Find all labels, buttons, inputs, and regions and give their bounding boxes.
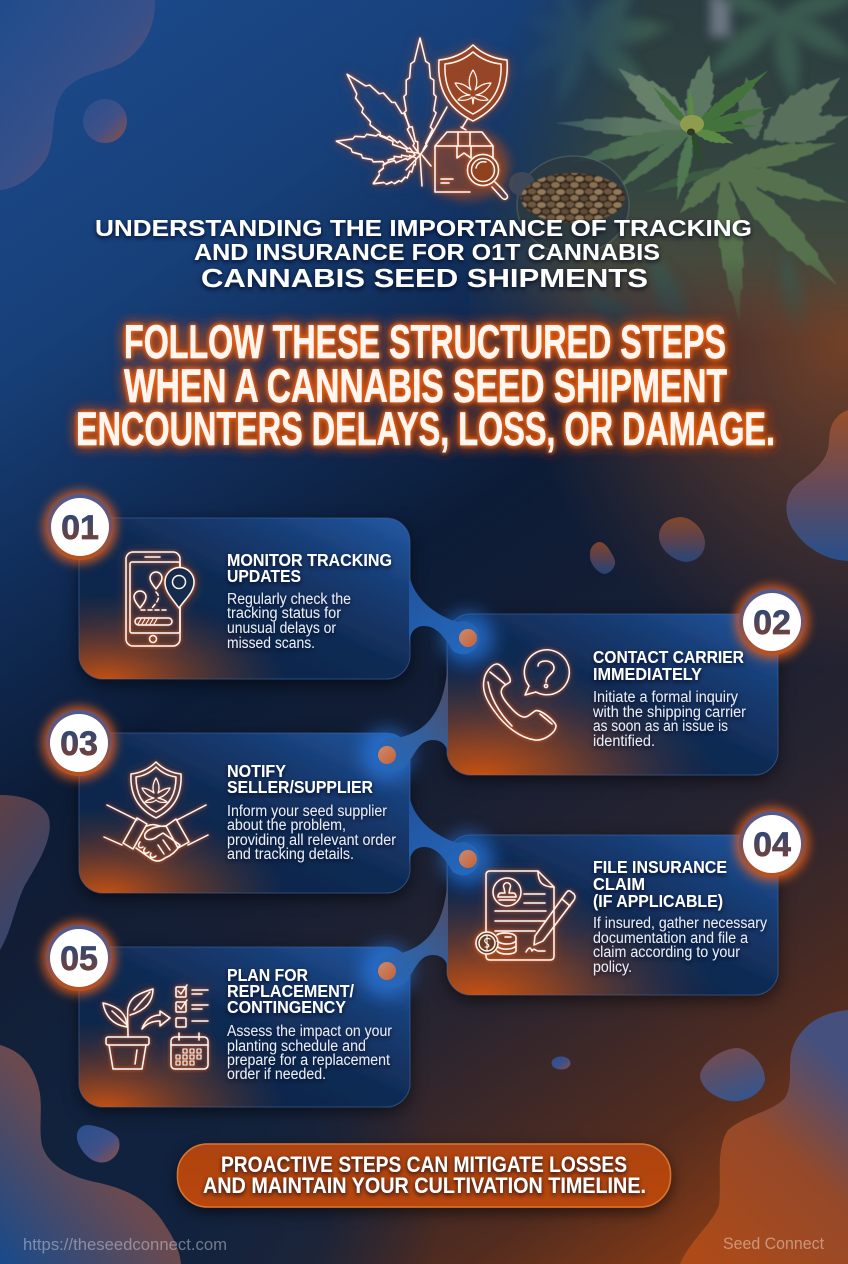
photo: seed bowl xyxy=(509,156,629,254)
text: file insurance claim: FILE INSURANCE xyxy=(593,857,727,877)
text: plan for replacement xyxy=(227,965,392,1083)
card 1 xyxy=(79,518,410,679)
card 4 xyxy=(447,835,778,995)
number badge 03 xyxy=(42,706,116,780)
plant two foreground leaves xyxy=(648,142,847,318)
text: notify seller/supplier: providing all relevant order xyxy=(227,832,396,849)
text: contact carrier immediately: with the shipping carrier xyxy=(592,704,746,721)
text: plan for replacement: PLAN FOR xyxy=(227,965,308,985)
text: contact carrier immediately: IMMEDIATELY xyxy=(593,664,702,684)
text: monitor tracking updates: unusual delays or xyxy=(227,620,336,637)
blob: left xyxy=(0,795,50,950)
text: file insurance claim: If insured, gather necessary xyxy=(593,915,767,932)
magnifier xyxy=(468,154,508,199)
icon: phone with map pins xyxy=(126,552,194,646)
text: notify seller/supplier xyxy=(227,761,396,863)
blurred background leaves xyxy=(546,0,848,324)
number badge 04: 04 xyxy=(753,826,791,864)
card 2 xyxy=(447,614,778,775)
photo: cannabis plants xyxy=(479,0,848,326)
icon: warm glow behind package xyxy=(426,129,510,201)
text: contact carrier immediately: as soon as an issue is xyxy=(593,718,728,735)
icon: phone handset with question bubble xyxy=(483,650,569,740)
text: notify seller/supplier: Inform your seed supplier xyxy=(227,803,387,820)
text: file insurance claim: documentation and file a xyxy=(593,930,748,947)
blob: mid small xyxy=(590,542,615,574)
number badge 05 xyxy=(42,921,116,995)
text: contact carrier immediately: identified. xyxy=(593,733,655,750)
step 2 content xyxy=(483,647,746,750)
cannabis leaf xyxy=(334,38,447,195)
warm right-side wash xyxy=(420,0,848,760)
text: monitor tracking updates: missed scans. xyxy=(227,635,315,652)
number badge 04 xyxy=(735,807,809,881)
blob: top-left xyxy=(0,0,155,190)
number badge 02 xyxy=(735,585,809,659)
blob: bottom-right xyxy=(680,1010,848,1264)
footer url: https://theseedconnect.com xyxy=(23,1235,227,1254)
plant one foreground leaves xyxy=(555,52,723,203)
callout: AND MAINTAIN YOUR CULTIVATION TIMELINE. xyxy=(203,1173,646,1198)
text: file insurance claim: (IF APPLICABLE) xyxy=(593,891,723,911)
text: plan for replacement: CONTINGENCY xyxy=(227,997,346,1017)
title: UNDERSTANDING THE IMPORTANCE OF TRACKING xyxy=(95,215,752,241)
text: file insurance claim: policy. xyxy=(593,959,632,976)
number badge 03: 03 xyxy=(60,725,98,763)
blob: small bottom-left xyxy=(77,1125,120,1163)
connector 3 to 4 xyxy=(409,793,494,885)
back leaves xyxy=(737,77,848,144)
icon: potted plant, checklist and calendar xyxy=(103,985,208,1069)
text: monitor tracking updates xyxy=(227,550,392,652)
number badge 05: 05 xyxy=(60,940,98,978)
icon: shield and handshake xyxy=(104,762,208,861)
text: plan for replacement: planting schedule and xyxy=(227,1038,366,1055)
navy lower-left wash xyxy=(0,900,450,1264)
callout xyxy=(178,1144,670,1207)
title xyxy=(95,215,752,293)
text: plan for replacement: Assess the impact on your xyxy=(227,1023,392,1040)
text: notify seller/supplier: NOTIFY xyxy=(227,761,286,781)
text: contact carrier immediately: CONTACT CARRIER xyxy=(593,647,744,667)
text: contact carrier immediately: Initiate a formal inquiry xyxy=(593,689,738,706)
number badge 01 xyxy=(43,490,117,564)
connector 2 to 3 xyxy=(361,648,448,781)
blob: tiny xyxy=(552,1056,570,1070)
panel: card shapes and connectors xyxy=(79,518,778,1107)
number badge 02: 02 xyxy=(753,604,791,642)
step 3 content xyxy=(104,761,396,863)
step 5 content xyxy=(103,965,392,1083)
card 5 xyxy=(79,947,410,1107)
text: monitor tracking updates: MONITOR TRACKING xyxy=(227,550,392,570)
step 4 content xyxy=(476,857,767,976)
text: plan for replacement: prepare for a replacement xyxy=(227,1052,391,1069)
text: file insurance claim: claim according to your xyxy=(593,944,740,961)
footer brand: Seed Connect xyxy=(723,1234,824,1253)
title: AND INSURANCE FOR O1T CANNABIS xyxy=(194,239,660,265)
blob: right xyxy=(786,410,848,561)
blob: bottom-left xyxy=(0,1045,181,1264)
callout: PROACTIVE STEPS CAN MITIGATE LOSSES xyxy=(221,1152,627,1177)
connector 4 to 5 xyxy=(361,863,448,997)
number badge 01: 01 xyxy=(61,509,99,547)
icon: insurance document, pen and coins xyxy=(476,871,575,960)
icon: cannabis leaf, shield, package and magnifier xyxy=(334,38,508,199)
shield xyxy=(439,45,507,130)
text: notify seller/supplier: and tracking details. xyxy=(227,846,354,863)
text: plan for replacement: order if needed. xyxy=(227,1066,326,1083)
card 3 xyxy=(79,733,410,893)
text: monitor tracking updates: Regularly check the xyxy=(227,591,351,608)
step 1 content xyxy=(126,550,392,652)
text: notify seller/supplier: SELLER/SUPPLIER xyxy=(227,777,373,797)
text: monitor tracking updates: UPDATES xyxy=(227,566,301,586)
blob: bottom-right oval xyxy=(700,1048,765,1101)
connector 1 to 2 xyxy=(409,572,494,664)
text: monitor tracking updates: tracking status for xyxy=(227,605,341,622)
text: file insurance claim xyxy=(593,857,767,976)
headline xyxy=(76,315,775,455)
blob: mid right oval xyxy=(659,517,705,562)
blob: small top-left xyxy=(83,99,127,143)
text: file insurance claim: CLAIM xyxy=(593,874,645,894)
text: contact carrier immediately xyxy=(592,647,746,750)
package xyxy=(435,132,493,192)
text: plan for replacement: REPLACEMENT/ xyxy=(227,981,354,1001)
title: CANNABIS SEED SHIPMENTS xyxy=(201,265,648,293)
bud spikes xyxy=(654,70,772,168)
text: notify seller/supplier: about the problem, xyxy=(227,817,346,834)
